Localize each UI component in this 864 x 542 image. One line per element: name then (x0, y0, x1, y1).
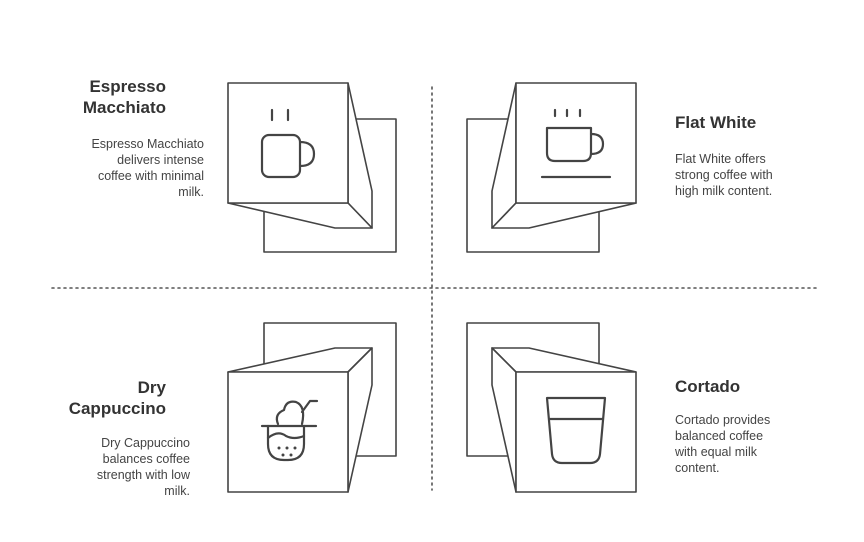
box: espresso macchiato (228, 83, 396, 252)
body: flat white: high milk content. (675, 184, 772, 198)
box: dry cappuccino (228, 323, 396, 492)
body: dry cappuccino: balances coffee (103, 452, 190, 466)
text: espresso macchiato: Macchiato (83, 98, 166, 117)
body: dry cappuccino: strength with low (97, 468, 190, 482)
icon: glass (547, 398, 605, 463)
text: dry cappuccino: Cappuccino (69, 399, 166, 418)
body: espresso macchiato: coffee with minimal (98, 169, 204, 183)
body: flat white: strong coffee with (675, 168, 773, 182)
body: cortado (675, 413, 770, 475)
box: cortado (467, 323, 636, 492)
box: flat white (467, 83, 636, 252)
body: espresso macchiato: milk. (178, 185, 204, 199)
text: cortado: Cortado (675, 377, 740, 396)
body: espresso macchiato (91, 137, 204, 199)
icon: mug (262, 110, 314, 177)
body: flat white (675, 152, 773, 198)
body: espresso macchiato: delivers intense (117, 153, 204, 167)
icon: cup with saucer (542, 110, 610, 177)
body: dry cappuccino: milk. (164, 484, 190, 498)
text: dry cappuccino: Dry (138, 378, 166, 397)
body: espresso macchiato: Espresso Macchiato (91, 137, 204, 151)
body: dry cappuccino: Dry Cappuccino (101, 436, 190, 450)
text: flat white: Flat White (675, 113, 756, 132)
text: espresso macchiato (83, 77, 166, 117)
body: cortado: Cortado provides (675, 413, 770, 427)
text: espresso macchiato: Espresso (89, 77, 166, 96)
body: cortado: content. (675, 461, 719, 475)
icon: frappe (262, 401, 317, 460)
text: dry cappuccino (69, 378, 166, 418)
body: cortado: with equal milk (675, 445, 757, 459)
body: dry cappuccino (97, 436, 190, 498)
body: cortado: balanced coffee (675, 429, 763, 443)
body: flat white: Flat White offers (675, 152, 766, 166)
